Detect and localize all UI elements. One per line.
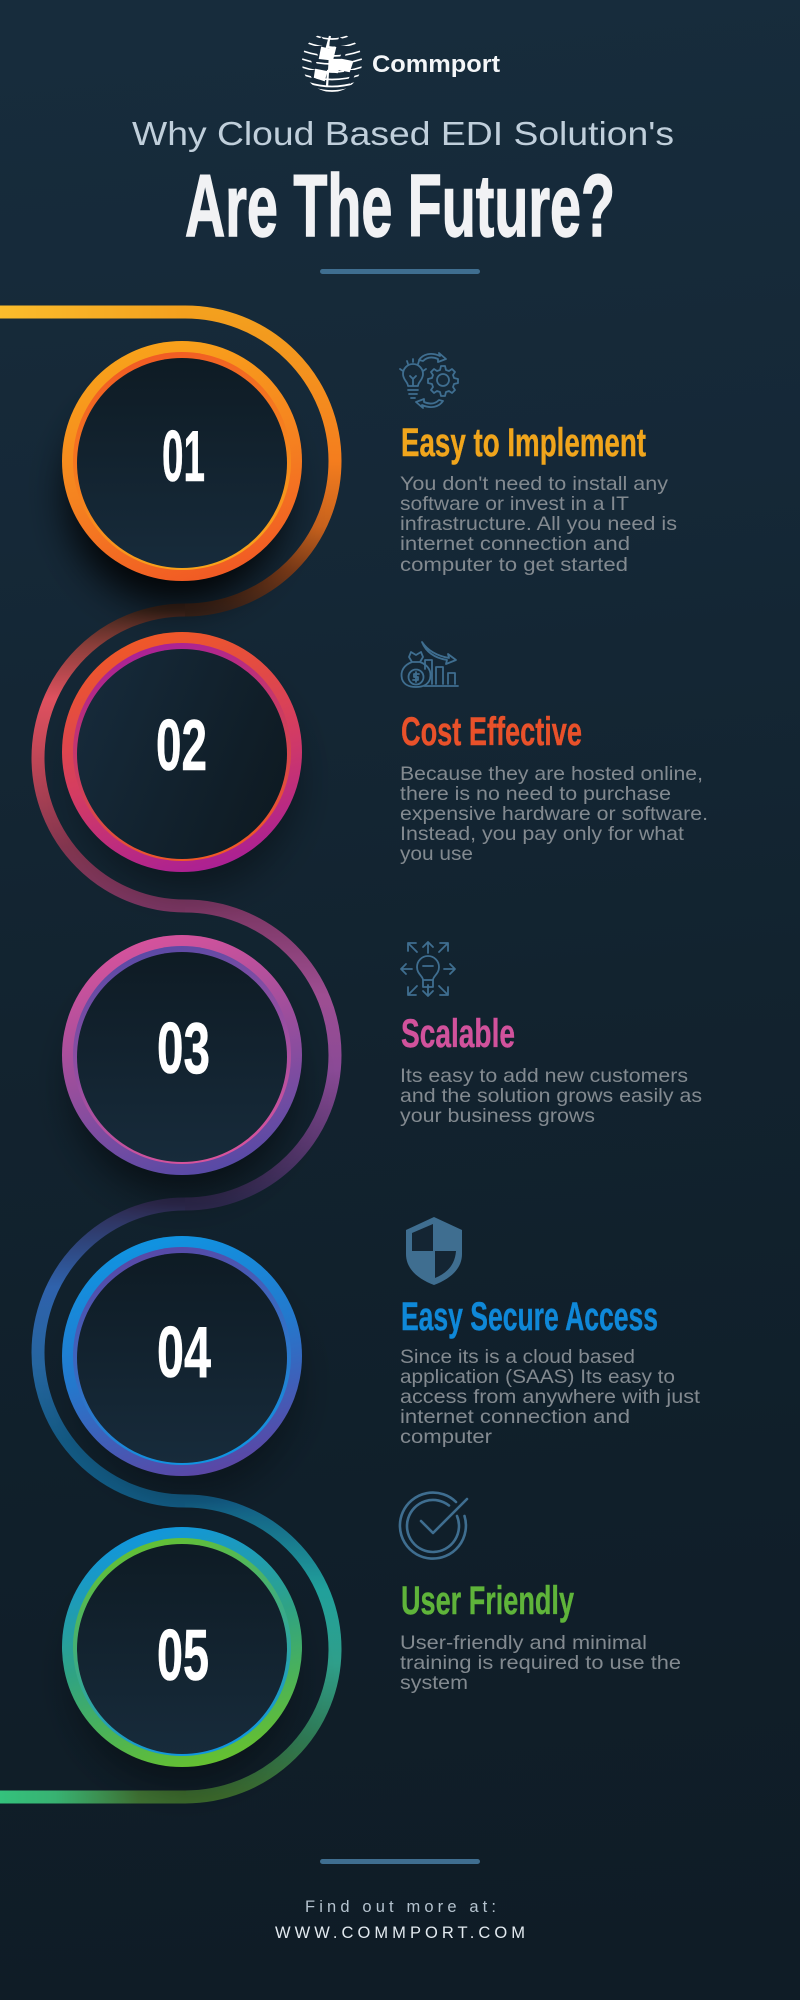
panel: step 2	[400, 642, 708, 865]
logo: Commport	[302, 36, 500, 91]
body text	[400, 1346, 701, 1448]
heading: Easy to Implement	[401, 421, 646, 465]
number 03: 03	[157, 1009, 210, 1089]
number 02: 02	[156, 706, 207, 786]
body text	[400, 473, 677, 576]
ribbon path connecting circles	[0, 312, 335, 1797]
panel: step 1	[400, 353, 677, 576]
circle 04	[62, 1236, 302, 1476]
icon: bulb, gear and cycle arrows	[400, 353, 458, 408]
body text	[400, 1632, 681, 1694]
panel: step 5	[400, 1493, 681, 1694]
body text: Instead, you pay only for what	[400, 823, 685, 845]
circle 05	[62, 1527, 302, 1767]
footer text	[275, 1898, 525, 1942]
body text: your business grows	[400, 1105, 595, 1127]
heading: Scalable	[401, 1012, 515, 1056]
body text	[400, 1065, 702, 1127]
panel: step 3	[400, 942, 702, 1127]
icon: bulb with arrows radiating	[401, 942, 455, 996]
body text: infrastructure. All you need is	[400, 513, 677, 535]
body text: you use	[400, 843, 473, 865]
body text: Its easy to add new customers	[400, 1065, 688, 1087]
body text: there is no need to purchase	[400, 783, 671, 805]
circle 03	[62, 935, 302, 1175]
icon: globe	[302, 36, 362, 91]
panel: step 4	[400, 1217, 701, 1448]
number 05: 05	[157, 1616, 209, 1696]
number 04: 04	[157, 1313, 211, 1393]
body text: application (SAAS) Its easy to	[400, 1366, 675, 1388]
footer text: WWW.COMMPORT.COM	[275, 1924, 525, 1942]
circle 02	[62, 632, 302, 872]
footer text: Find out more at:	[305, 1898, 496, 1916]
icon: shield	[406, 1217, 462, 1285]
heading: User Friendly	[401, 1579, 575, 1623]
body text: User-friendly and minimal	[400, 1632, 647, 1654]
subtitle: Why Cloud Based EDI Solution's	[132, 115, 674, 152]
body text: computer	[400, 1426, 493, 1448]
body text: You don't need to install any	[400, 473, 668, 495]
body text: training is required to use the	[400, 1652, 681, 1674]
body text: software or invest in a IT	[400, 493, 629, 515]
icon: money bag and falling bar chart	[401, 642, 458, 687]
body text: expensive hardware or software.	[400, 803, 708, 825]
circle shadows	[68, 388, 296, 1784]
body text	[400, 763, 708, 865]
body text: Because they are hosted online,	[400, 763, 703, 785]
heading: Easy Secure Access	[401, 1295, 658, 1339]
body text: Since its is a cloud based	[400, 1346, 635, 1368]
body text: access from anywhere with just	[400, 1386, 701, 1408]
top divider	[320, 269, 480, 274]
icon: check mark in double ring	[400, 1493, 467, 1559]
body text: system	[400, 1672, 468, 1694]
circle 01	[62, 341, 302, 581]
heading: Cost Effective	[401, 710, 582, 754]
body text: computer to get started	[400, 554, 628, 576]
logo wordmark: Commport	[372, 51, 500, 78]
body text: internet connection and	[400, 533, 630, 555]
body text: internet connection and	[400, 1406, 630, 1428]
body text: and the solution grows easily as	[400, 1085, 702, 1107]
bottom divider	[320, 1859, 480, 1864]
number 01: 01	[162, 417, 205, 497]
